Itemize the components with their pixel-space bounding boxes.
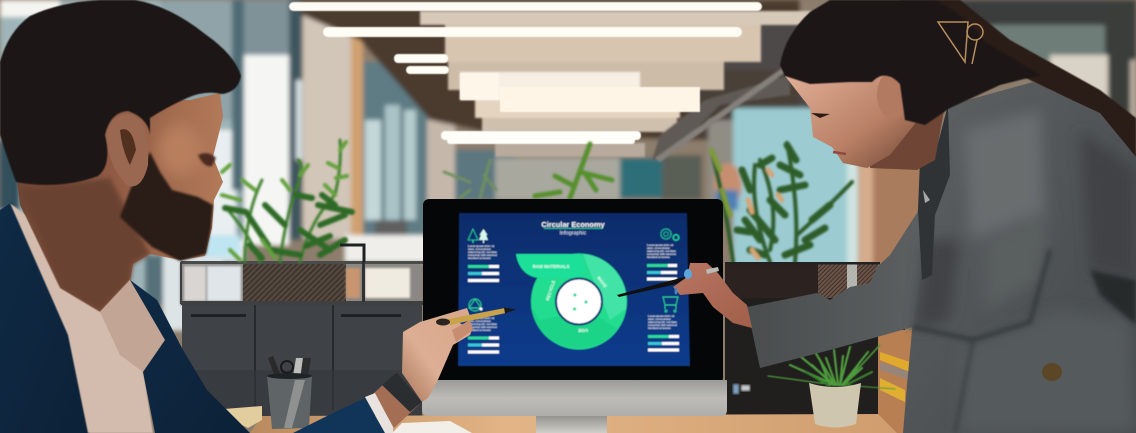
text block: bottom right: nonummy nibh euismod — [648, 324, 677, 327]
subtitle: Infographic — [560, 230, 587, 236]
monitor — [392, 199, 727, 433]
pen holder — [267, 356, 312, 429]
text block: bottom right — [648, 315, 678, 330]
forearm — [374, 372, 422, 428]
text block: top left: tincidunt ut laoreet. — [468, 257, 492, 260]
circular economy wheel: RECYCLE — [545, 280, 556, 301]
plants: centre background — [444, 144, 612, 198]
monitor stand — [536, 414, 607, 433]
raw materials segment — [516, 254, 585, 278]
text block: bottom left: Lorem ipsum dolor sit — [468, 317, 494, 320]
icon: shopping cart — [663, 297, 678, 312]
shirt cuff — [365, 393, 393, 433]
blue fingernail — [684, 269, 692, 279]
neck shadow — [20, 178, 150, 312]
text block: bottom right: adipiscing elit, sed diam — [648, 321, 678, 324]
text block: bottom right: tincidunt ut laoreet. — [648, 327, 672, 330]
progress bars: bottom right — [648, 335, 679, 352]
progress bars: bottom left — [468, 336, 499, 354]
icon: gears — [661, 229, 679, 240]
progress bars: top left — [468, 265, 499, 282]
hair clip — [938, 22, 983, 64]
blazer shading — [915, 110, 1136, 433]
text block: bottom left: adipiscing elit, sed diam — [468, 323, 498, 326]
eye — [811, 113, 830, 118]
ceiling baffles — [420, 11, 812, 162]
plant on desk — [768, 345, 895, 428]
circular economy wheel: RAW MATERIALS — [533, 264, 569, 269]
screen infographic — [458, 213, 690, 366]
jacket lapel and sleeve — [130, 280, 250, 433]
text block: bottom right: Lorem ipsum dolor sit — [648, 315, 674, 318]
circular economy wheel: MAKE — [596, 275, 608, 289]
icon: recycle — [469, 299, 482, 311]
belt shadow — [1090, 270, 1136, 325]
man with beard — [0, 0, 516, 433]
grass — [768, 345, 895, 389]
text block: top left: amet, consectetuer — [468, 248, 491, 251]
neck — [870, 90, 945, 170]
desk — [250, 414, 897, 433]
face — [785, 72, 918, 168]
text block: top right: nonummy nibh euismod — [647, 253, 676, 256]
suit jacket — [0, 202, 90, 433]
beard — [120, 152, 213, 261]
text block: bottom left: tincidunt ut laoreet. — [468, 329, 492, 332]
text block: top right: adipiscing elit, sed diam — [647, 250, 677, 253]
ear — [877, 71, 909, 119]
chair arm behind plant — [340, 245, 364, 262]
text block: bottom left: nonummy nibh euismod — [468, 326, 497, 329]
sleeve fold — [913, 250, 1050, 340]
ear — [105, 114, 148, 187]
text block: top right: tincidunt ut laoreet. — [647, 256, 670, 259]
woman in grey blazer — [617, 0, 1136, 433]
wristwatch — [382, 372, 422, 412]
text block: top right: Lorem ipsum dolor sit — [647, 244, 673, 247]
text block: top left — [468, 245, 498, 260]
hair tail — [935, 0, 1136, 170]
text block: bottom left — [468, 317, 498, 332]
fingers over pen — [452, 320, 473, 342]
pen — [436, 308, 516, 326]
text block: top right — [647, 244, 677, 259]
button — [1042, 363, 1062, 381]
pen end — [706, 267, 719, 274]
mouth — [833, 152, 846, 154]
progress bars: top right — [647, 264, 677, 280]
pen — [617, 270, 708, 297]
paper on desk — [392, 421, 472, 433]
eye shadow — [198, 153, 216, 166]
text block: top left: nonummy nibh euismod — [468, 254, 497, 257]
lapel — [918, 105, 950, 280]
face and neck skin — [17, 93, 223, 312]
cheek highlight — [158, 124, 202, 176]
monitor chin — [422, 380, 727, 416]
hair — [0, 0, 241, 185]
pot — [809, 383, 861, 428]
infographic title: Circular Economy — [541, 220, 606, 229]
hair top — [780, 0, 1040, 125]
cabinets and planter, left — [180, 261, 423, 417]
icon: trees — [468, 229, 488, 243]
text block: top right: amet, consectetuer — [647, 247, 670, 250]
sleeve — [747, 213, 925, 368]
circular economy wheel: USE — [577, 327, 588, 333]
text block: top left: Lorem ipsum dolor sit — [468, 245, 494, 248]
monitor body — [423, 199, 723, 384]
plant: right, behind monitor — [711, 143, 852, 262]
cabinets and planter, right — [725, 262, 928, 433]
blazer body — [903, 82, 1136, 433]
forearm sleeve — [293, 398, 385, 433]
text block: top left: adipiscing elit, sed diam — [468, 251, 498, 254]
shirt — [10, 203, 165, 433]
circular economy wheel — [516, 254, 627, 350]
hand — [402, 308, 472, 402]
hand — [673, 263, 752, 328]
text block: bottom right: amet, consectetuer — [648, 318, 671, 321]
wheel centre — [556, 278, 602, 324]
text block: bottom left: amet, consectetuer — [468, 320, 491, 323]
notebook on desk — [224, 406, 262, 428]
ceiling lights — [289, 2, 762, 144]
plant: left — [222, 140, 352, 262]
